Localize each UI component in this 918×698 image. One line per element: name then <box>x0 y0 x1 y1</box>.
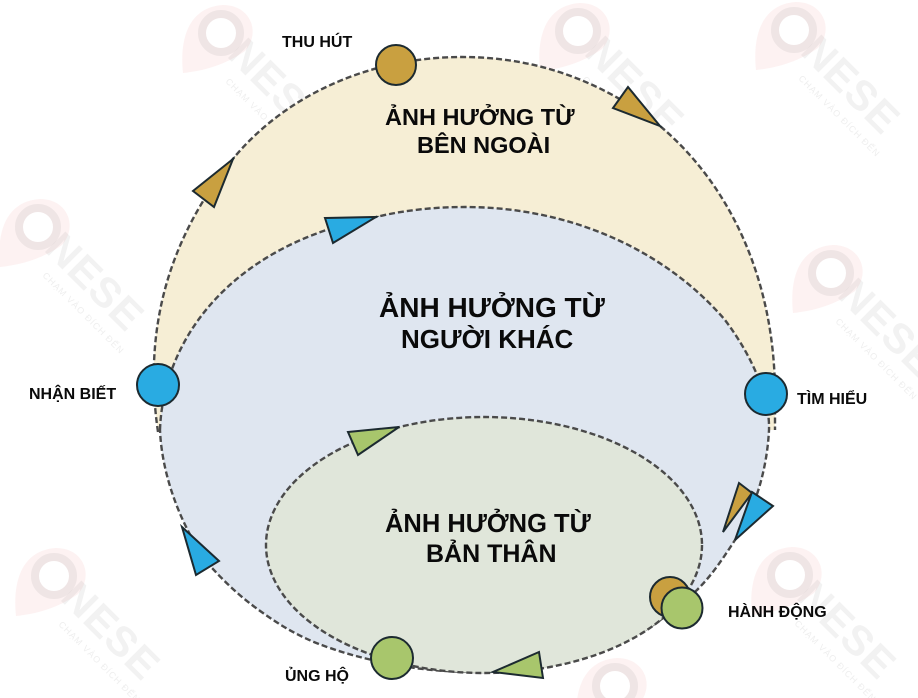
watermarks: NESE <box>793 26 910 143</box>
node: nhan biet <box>137 364 179 406</box>
outer region: external influence <box>154 57 775 432</box>
watermarks: NESE <box>53 572 170 689</box>
arrow: brown right <box>723 483 752 532</box>
label: hanh dong: HÀNH ĐỘNG <box>728 602 827 621</box>
node: hanh dong green <box>662 588 702 628</box>
arrow: blue lower left <box>182 527 219 575</box>
heading: self influence: ẢNH HƯỞNG TỪ <box>385 508 592 538</box>
watermarks: NESE <box>37 223 154 340</box>
node: tim hieu <box>745 373 787 415</box>
label: ung ho: ỦNG HỘ <box>285 666 349 685</box>
heading: self influence <box>385 508 592 568</box>
node: ung ho <box>371 637 413 679</box>
watermarks: CHẠM VÀO ĐÍCH ĐẾN <box>797 73 882 159</box>
inner region: self influence <box>266 417 702 673</box>
label: thu hut: THU HÚT <box>282 32 352 51</box>
label: nhan biet: NHẬN BIẾT <box>29 384 116 403</box>
arrow: blue top <box>325 217 376 243</box>
heading: influence from others: NGƯỜI KHÁC <box>401 324 574 354</box>
heading: external influence: ẢNH HƯỞNG TỪ <box>385 102 575 130</box>
heading: influence from others <box>379 291 606 354</box>
watermarks: CHẠM VÀO ĐÍCH ĐẾN <box>224 76 309 162</box>
arrow: brown upper left <box>193 159 233 207</box>
node: hanh dong brown <box>650 577 690 617</box>
heading: external influence <box>385 102 575 158</box>
arrow: blue right <box>735 492 773 540</box>
watermarks: NESE <box>220 29 337 146</box>
arrow: green bottom <box>493 652 543 678</box>
heading: self influence: BẢN THÂN <box>426 538 557 568</box>
middle region: influence from others <box>160 207 769 672</box>
watermarks: NESE <box>577 27 694 144</box>
watermarks: CHẠM VÀO ĐÍCH ĐẾN <box>581 74 666 160</box>
label: tim hieu: TÌM HIỂU <box>797 389 867 408</box>
arrow: green upper <box>348 427 399 455</box>
heading: external influence: BÊN NGOÀI <box>417 131 550 158</box>
arrow: brown upper right <box>613 87 660 126</box>
heading: influence from others: ẢNH HƯỞNG TỪ <box>379 291 606 323</box>
watermarks: CHẠM VÀO ĐÍCH ĐẾN <box>41 270 126 356</box>
watermarks: NESE <box>789 571 906 688</box>
watermarks: CHẠM VÀO ĐÍCH ĐẾN <box>834 316 918 402</box>
node: thu hut <box>376 45 416 85</box>
